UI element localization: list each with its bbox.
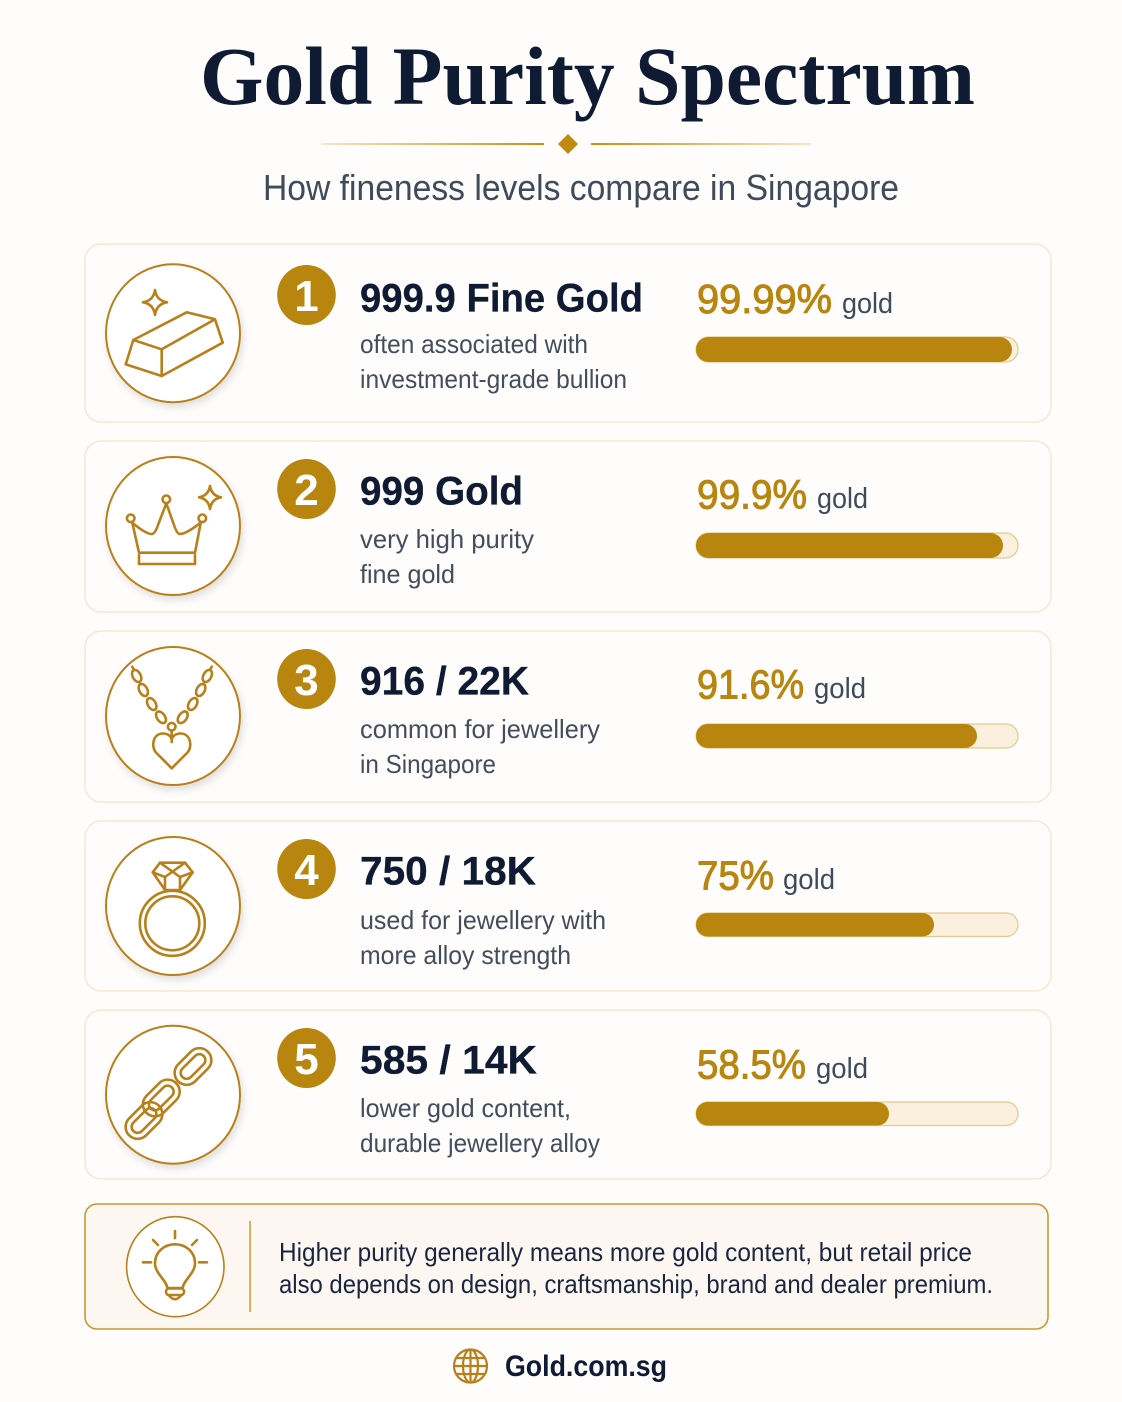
icon: crown [106,457,240,595]
title divider [321,134,811,154]
number badge 5 [277,1028,336,1088]
description: used for jewellery with [360,905,606,935]
description: durable jewellery alloy [360,1128,600,1158]
callout: price note [85,1204,1048,1329]
purity bar [696,533,1018,558]
description: common for jewellery [360,714,600,744]
percentage: 99.99% [697,276,832,322]
percentage: 75% [697,852,774,898]
percentage: 99.9% [697,472,807,518]
title: Gold Purity Spectrum [200,30,975,122]
icon: light bulb [127,1217,224,1317]
number badge 2: 2 [294,466,319,515]
purity bar [696,913,1018,936]
percentage [697,1042,868,1088]
number badge 4: 4 [294,846,319,895]
icon: chain links [106,1026,240,1164]
note text [279,1237,993,1299]
percentage [697,852,835,898]
number badge 5: 5 [294,1035,319,1084]
panel: 916 / 22K [85,631,1051,802]
heading: 585 / 14K [360,1038,537,1082]
description [360,1093,600,1158]
website name: Gold.com.sg [505,1350,667,1383]
description [360,329,627,394]
description: fine gold [360,559,455,589]
panel: 750 / 18K [85,821,1051,991]
percentage: gold [814,673,866,705]
heading: 750 / 18K [360,850,536,894]
description: very high purity [360,524,534,554]
heading: 999 Gold [360,470,523,514]
number badge 3 [277,649,336,709]
icon: gold bar [106,264,240,402]
note text: also depends on design, craftsmanship, brand and dealer premium. [279,1269,993,1299]
panel: 999 gold [85,441,1051,612]
description: investment-grade bullion [360,364,627,394]
panel: 585 / 14K [85,1010,1051,1179]
percentage: gold [816,1053,868,1085]
note text: Higher purity generally means more gold content, but retail price [279,1237,972,1267]
percentage [697,472,868,518]
description [360,714,600,779]
percentage: gold [842,288,893,320]
number badge 3: 3 [294,656,319,705]
description: more alloy strength [360,940,571,970]
percentage: gold [783,864,835,896]
icon: globe [454,1350,487,1382]
percentage [697,662,866,708]
percentage: 58.5% [697,1042,806,1088]
subtitle: How fineness levels compare in Singapore [263,167,899,208]
description [360,524,534,589]
purity bar [696,337,1018,362]
number badge 1: 1 [294,272,319,321]
description: in Singapore [360,749,496,779]
number badge 1 [277,265,336,325]
percentage: gold [817,483,868,515]
description [360,905,606,970]
percentage: 91.6% [697,662,804,708]
footer brand [454,1350,667,1383]
panel: 999.9 fine gold [85,244,1051,422]
number badge 2 [277,459,336,519]
description: often associated with [360,329,588,359]
icon: necklace [106,647,240,785]
heading: 916 / 22K [360,660,529,704]
heading: 999.9 Fine Gold [360,276,643,320]
description: lower gold content, [360,1093,571,1123]
purity bar [696,1102,1018,1126]
icon: diamond ring [106,837,240,975]
number badge 4 [277,839,336,899]
purity bar [696,724,1018,748]
